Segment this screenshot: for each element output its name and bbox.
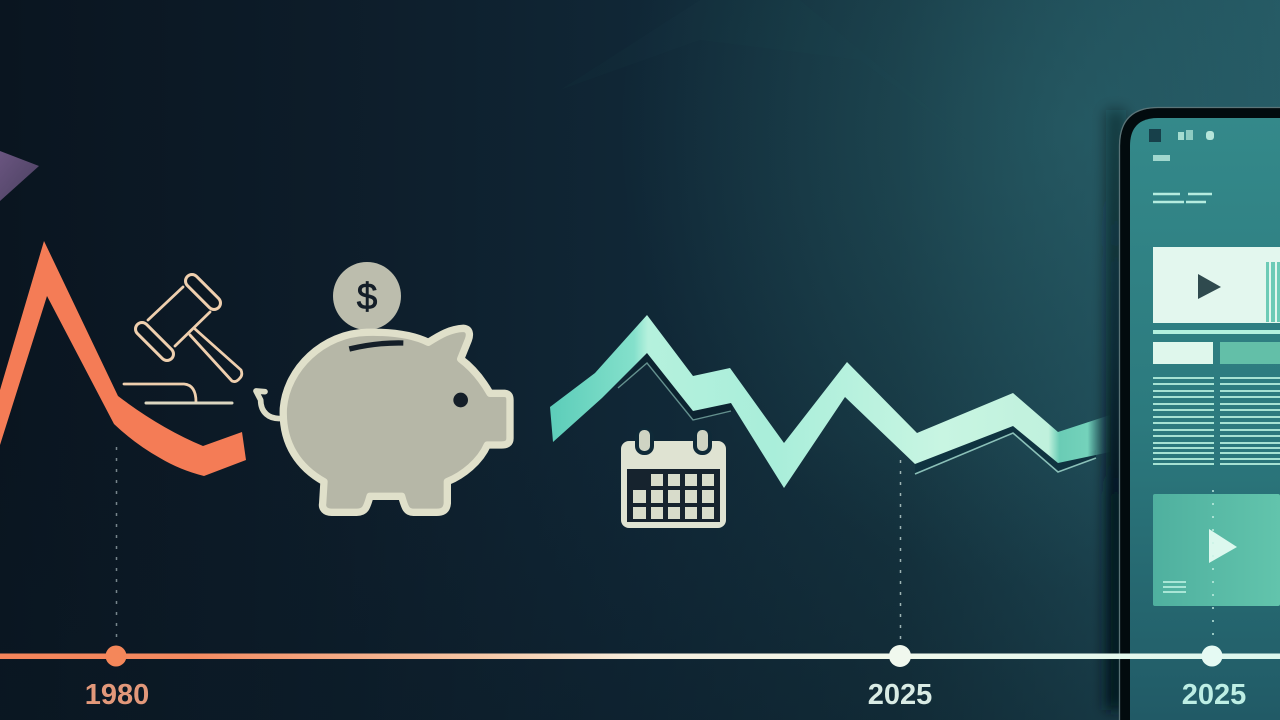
- phone header lines: [1153, 194, 1212, 202]
- milestone 1980: [85, 447, 149, 711]
- coin: [333, 262, 401, 330]
- milestone 2025 on phone: [1182, 490, 1246, 711]
- milestone 2025 on phone: 2025: [1182, 679, 1246, 711]
- video card: light: [1153, 247, 1280, 323]
- icon: gavel: [124, 281, 242, 403]
- green trend line: [550, 315, 1110, 488]
- icon: calendar: [621, 428, 726, 528]
- phone mockup: [1106, 108, 1280, 720]
- coin: $: [357, 276, 377, 317]
- purple triangle fragment: [0, 151, 39, 201]
- milestone 1980: 1980: [85, 679, 149, 711]
- phone status icons: [1149, 129, 1214, 161]
- timeline axis: [0, 654, 1280, 659]
- icon: piggy bank with coin: [256, 262, 510, 512]
- phone tab blocks: [1153, 342, 1280, 364]
- orange trend line: [0, 241, 246, 476]
- milestone 2025: 2025: [868, 679, 932, 711]
- phone text lines: [1153, 378, 1280, 464]
- piggy bank body: [256, 328, 510, 512]
- video card: teal: [1153, 494, 1280, 606]
- phone divider bar: [1153, 330, 1280, 334]
- milestone 2025: [868, 460, 932, 711]
